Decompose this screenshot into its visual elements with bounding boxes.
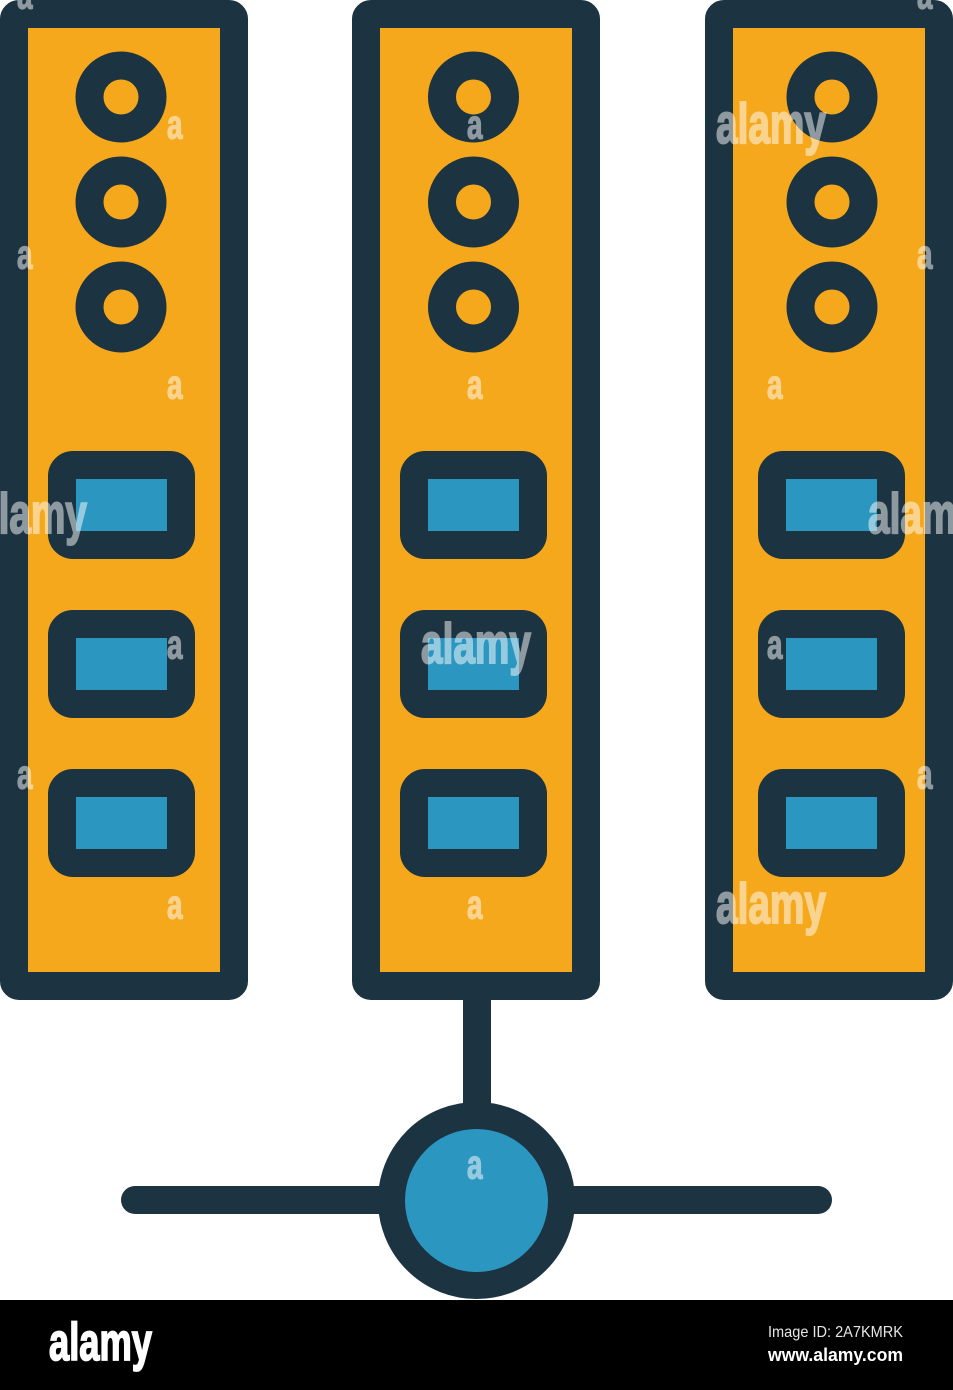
watermarks: a (467, 102, 483, 148)
watermarks: a (917, 232, 933, 278)
watermarks: a (917, 752, 933, 798)
watermarks: a (167, 882, 183, 928)
watermarks: a (17, 232, 33, 278)
watermarks: a (467, 882, 483, 928)
watermarks: a (167, 102, 183, 148)
server rack right (719, 14, 939, 986)
footer bar (0, 1300, 953, 1390)
footer logo: alamy (49, 1313, 152, 1372)
watermarks: alamy (716, 92, 826, 156)
image id: Image ID: 2A7KMRK (768, 1324, 903, 1341)
server rack left (14, 14, 234, 986)
network node (392, 1116, 562, 1286)
server rack middle (366, 14, 586, 986)
watermarks: a (767, 622, 783, 668)
watermarks: a (167, 362, 183, 408)
website: www.alamy.com (767, 1345, 903, 1365)
watermarks: a (167, 622, 183, 668)
watermarks: a (467, 362, 483, 408)
connector lines (135, 990, 818, 1200)
watermarks: a (467, 1142, 483, 1188)
watermarks: alamy (716, 872, 826, 936)
watermarks: a (17, 752, 33, 798)
watermarks: a (767, 362, 783, 408)
watermarks: alamy (421, 612, 531, 676)
